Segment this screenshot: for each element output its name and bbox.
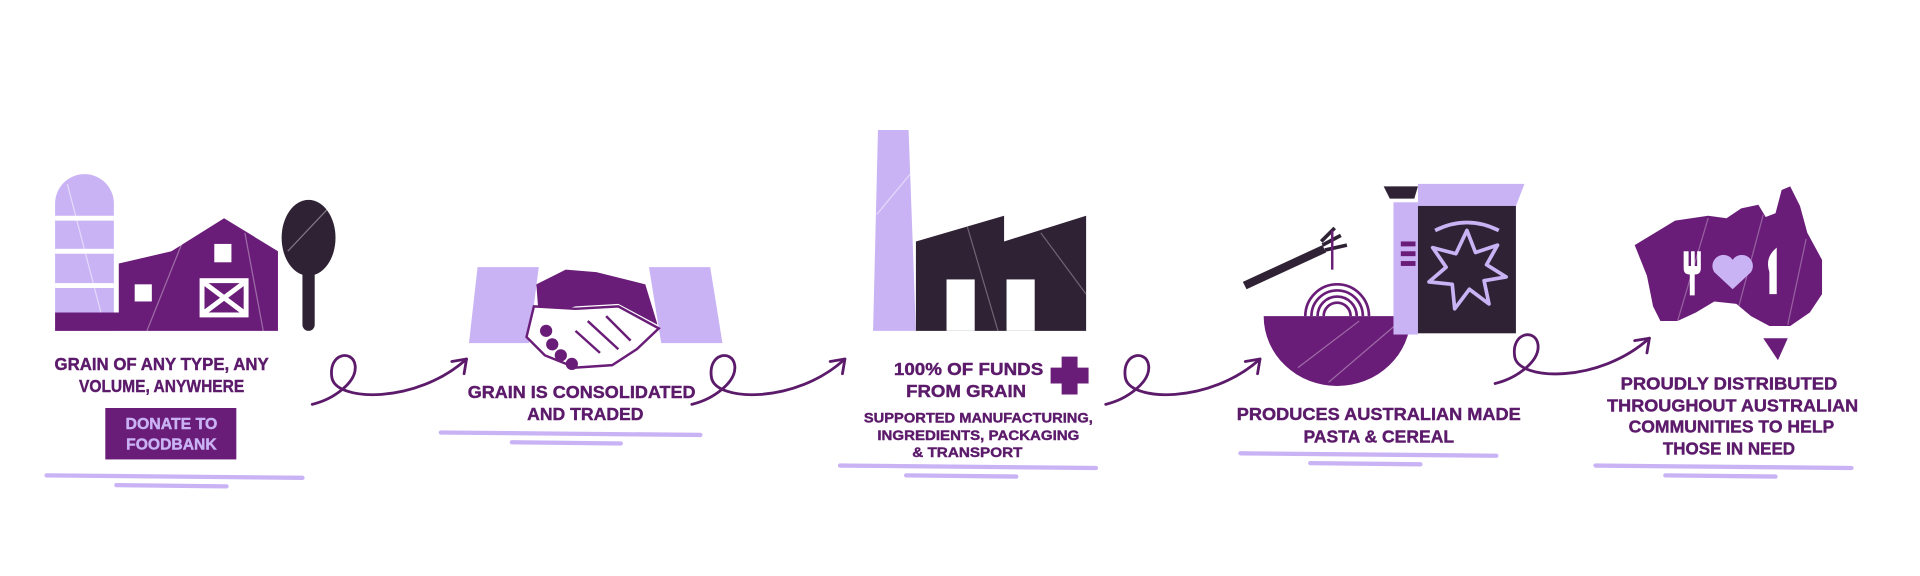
text: 100% of funds: FROM GRAIN <box>906 381 1026 401</box>
text: produces australian made: PASTA & CEREAL <box>1303 426 1454 446</box>
icon: barn <box>55 218 278 331</box>
icon: tree <box>282 200 336 331</box>
step 5: australia <box>1596 186 1858 477</box>
step 4: pasta and cereal <box>1237 184 1524 464</box>
underline <box>1596 466 1851 477</box>
arrow 2 <box>692 356 845 404</box>
arrow 3 <box>1106 356 1260 404</box>
text: supported manufacturing: & TRANSPORT <box>912 444 1023 460</box>
icon: plus <box>1051 357 1089 395</box>
icon: handshake <box>469 267 722 370</box>
text: 100% of funds <box>894 359 1043 401</box>
step 2: handshake <box>441 267 722 444</box>
step 1: farm <box>47 174 336 486</box>
icon: factory <box>873 130 1086 331</box>
icon: silo <box>55 174 114 331</box>
text: proudly distributed: PROUDLY DISTRIBUTED <box>1621 374 1838 394</box>
underline <box>47 475 302 486</box>
underline <box>840 466 1096 477</box>
text: grain of any type: VOLUME, ANYWHERE <box>79 376 244 396</box>
text: grain is consolidated: GRAIN IS CONSOLIDATED <box>468 382 696 402</box>
text: grain of any type: GRAIN OF ANY TYPE, ANY <box>54 354 269 374</box>
text: proudly distributed: THOSE IN NEED <box>1663 439 1795 459</box>
underline <box>1240 453 1496 464</box>
text: grain is consolidated <box>468 382 696 424</box>
underline <box>441 432 700 444</box>
arrow 1 <box>312 356 467 404</box>
button: donate to foodbank: DONATE TO <box>126 416 217 433</box>
text: produces australian made: PRODUCES AUSTRALIAN MADE <box>1237 404 1521 424</box>
icon: cereal box <box>1384 184 1524 335</box>
text: grain is consolidated: AND TRADED <box>527 404 644 424</box>
button: donate to foodbank <box>105 408 236 459</box>
text: proudly distributed: THROUGHOUT AUSTRALIAN <box>1607 396 1858 416</box>
button: donate to foodbank: FOODBANK <box>126 437 217 454</box>
text: proudly distributed <box>1607 374 1858 459</box>
step 3: factory <box>840 130 1096 477</box>
icon: pasta bowl <box>1264 284 1411 386</box>
text: proudly distributed: COMMUNITIES TO HELP <box>1629 416 1834 436</box>
icon: fork <box>1243 228 1347 289</box>
text: 100% of funds: 100% OF FUNDS <box>894 359 1043 379</box>
text: grain of any type <box>54 354 269 396</box>
text: supported manufacturing: INGREDIENTS, PACKAGING <box>877 427 1079 443</box>
icon: australia map <box>1635 186 1822 360</box>
text: produces australian made <box>1237 404 1521 446</box>
arrow 4 <box>1495 335 1649 384</box>
text: supported manufacturing <box>864 410 1093 460</box>
text: supported manufacturing: SUPPORTED MANUFACTURING, <box>864 410 1093 426</box>
